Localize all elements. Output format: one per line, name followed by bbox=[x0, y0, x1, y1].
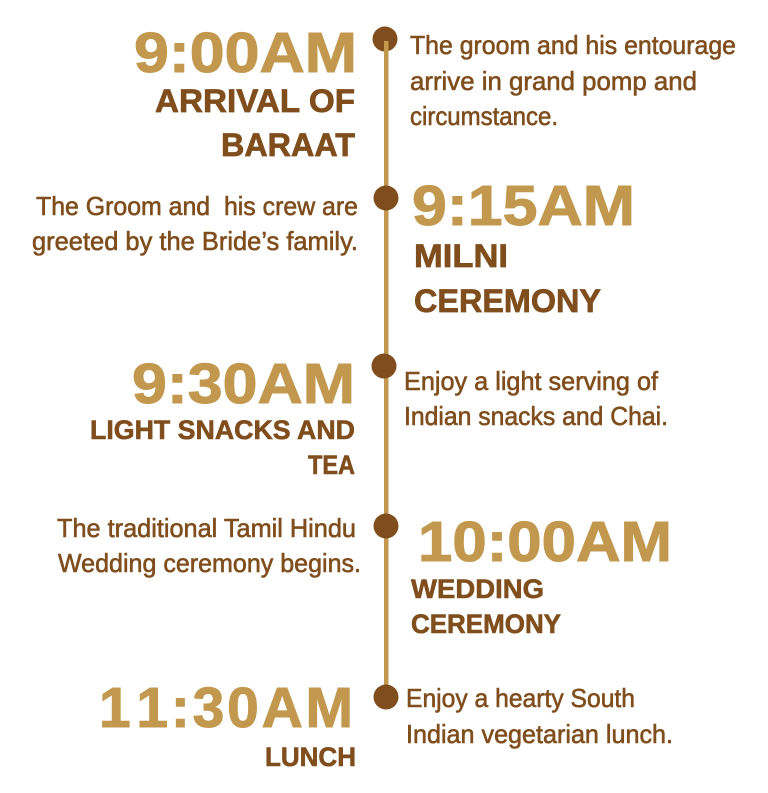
event title bbox=[90, 415, 355, 480]
description bbox=[404, 366, 668, 431]
event title bbox=[411, 574, 561, 639]
event title: MILNI bbox=[414, 238, 508, 274]
description bbox=[57, 513, 361, 578]
event: 9:00AM arrival of baraat bbox=[134, 21, 736, 163]
event title bbox=[155, 83, 355, 163]
event title: ARRIVAL OF bbox=[155, 83, 355, 119]
timeline spine bbox=[384, 41, 388, 697]
marker dot bbox=[374, 514, 398, 538]
description: circumstance. bbox=[410, 101, 558, 131]
description bbox=[32, 191, 358, 256]
event title: LUNCH bbox=[265, 742, 356, 772]
event: 9:15AM milni ceremony bbox=[32, 174, 635, 319]
description: Enjoy a hearty South bbox=[406, 683, 635, 713]
event title: TEA bbox=[308, 450, 355, 480]
description: arrive in grand pomp and bbox=[410, 66, 697, 96]
event title: CEREMONY bbox=[414, 283, 601, 319]
description: Indian vegetarian lunch. bbox=[406, 719, 673, 749]
description: Indian snacks and Chai. bbox=[404, 401, 668, 431]
description bbox=[410, 30, 736, 131]
time: 9:00AM bbox=[134, 21, 357, 85]
event title: CEREMONY bbox=[411, 609, 561, 639]
spine overlap on first dot bbox=[384, 41, 388, 53]
description: Wedding ceremony begins. bbox=[58, 548, 361, 578]
event title: WEDDING bbox=[411, 574, 544, 604]
description: Enjoy a light serving of bbox=[404, 366, 659, 396]
event title: BARAAT bbox=[221, 127, 355, 163]
time: 9:15AM bbox=[412, 174, 635, 238]
event: 10:00AM wedding ceremony bbox=[57, 510, 672, 639]
description bbox=[406, 683, 673, 749]
description: greeted by the Bride’s family. bbox=[32, 226, 358, 256]
marker dot bbox=[374, 684, 398, 710]
marker dot bbox=[372, 354, 396, 378]
event title: LIGHT SNACKS AND bbox=[90, 415, 355, 445]
time: 9:30AM bbox=[132, 352, 355, 416]
marker dot bbox=[372, 26, 398, 52]
marker dot bbox=[374, 186, 398, 210]
event: 9:30AM light snacks and tea bbox=[90, 352, 668, 480]
event: 11:30AM lunch bbox=[99, 676, 673, 772]
description: The traditional Tamil Hindu bbox=[57, 513, 356, 543]
description: The groom and his entourage bbox=[410, 30, 736, 60]
event title bbox=[414, 238, 601, 319]
time: 11:30AM bbox=[99, 676, 353, 740]
description: The Groom and his crew are bbox=[36, 191, 358, 221]
time: 10:00AM bbox=[418, 510, 672, 574]
